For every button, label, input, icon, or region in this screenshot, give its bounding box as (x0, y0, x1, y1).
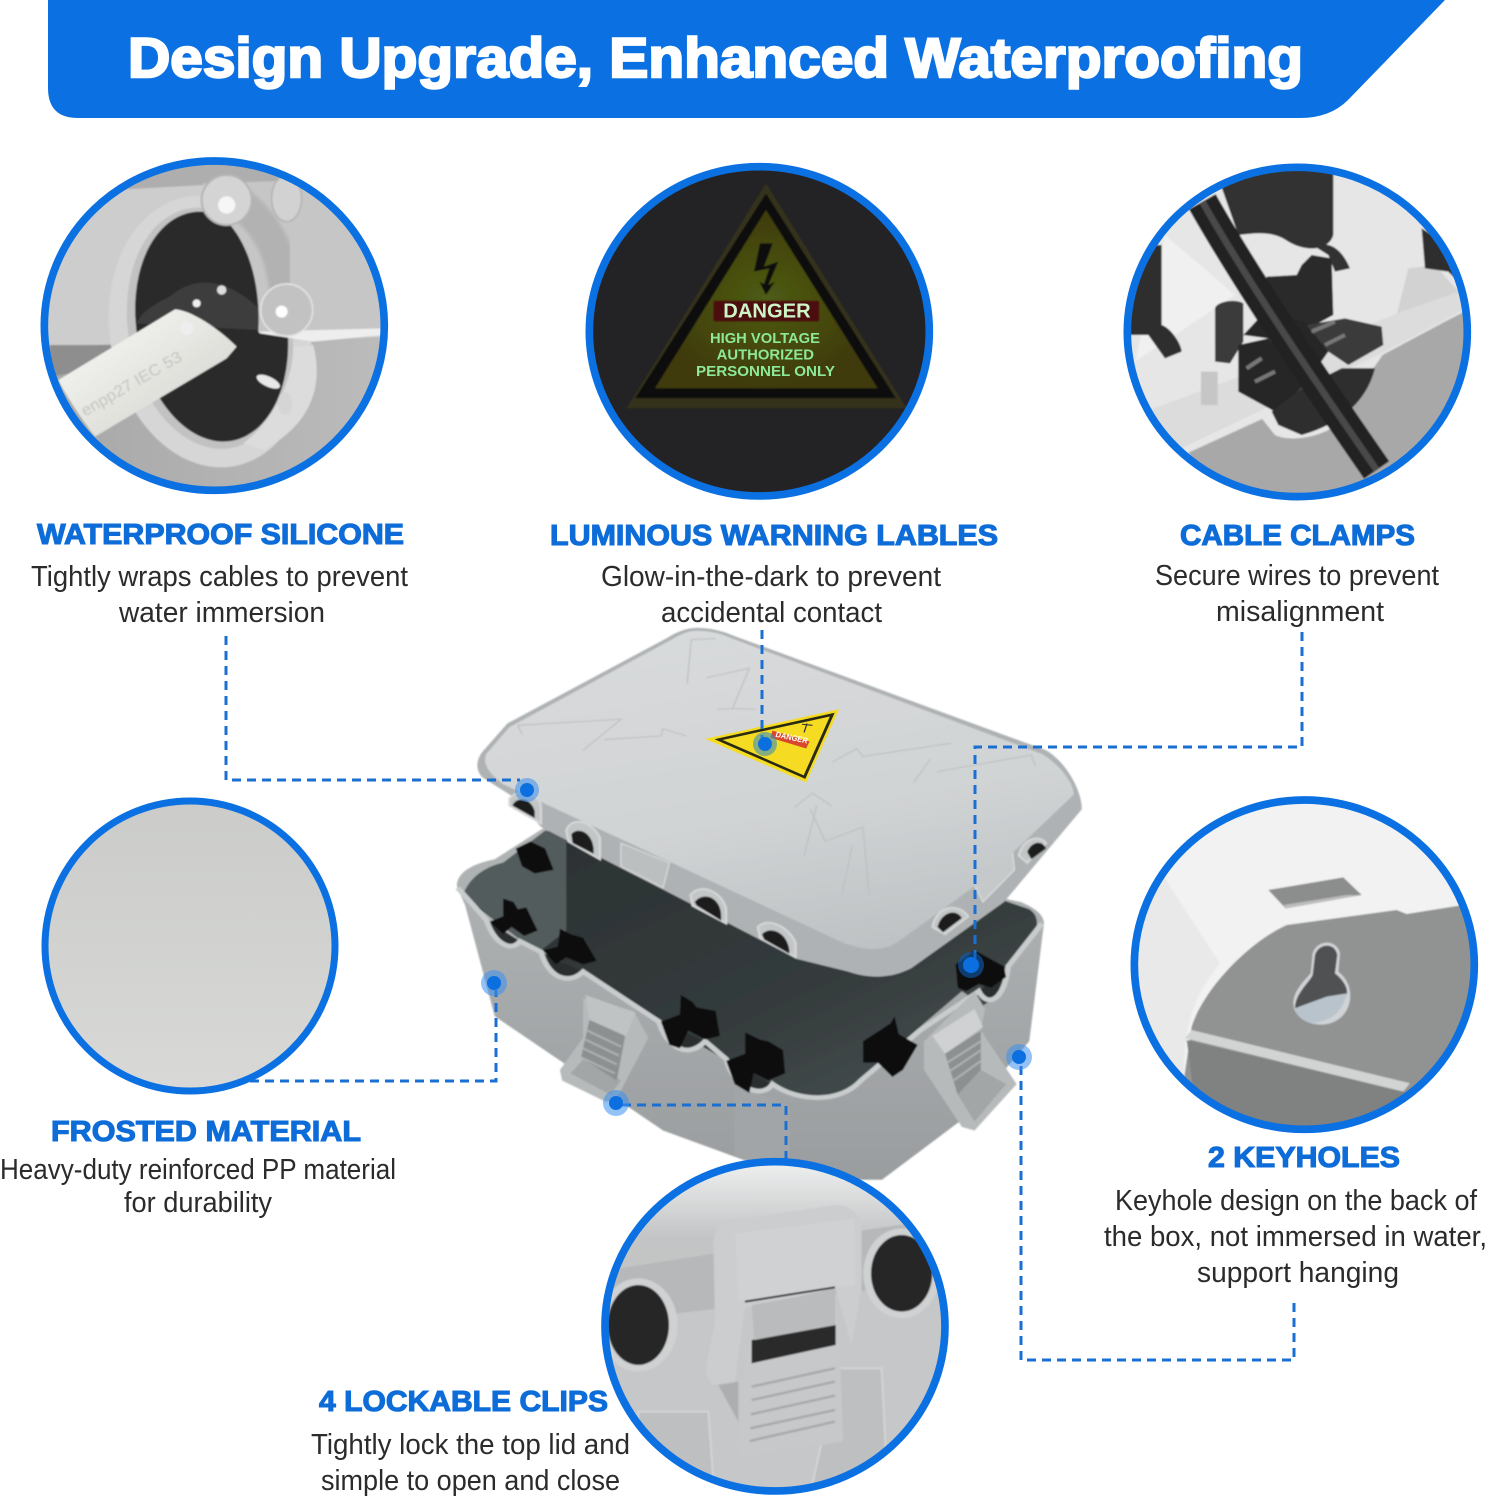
circle photo: glowing danger label (580, 160, 940, 507)
description: Heavy-duty reinforced PP material (0, 1154, 396, 1186)
marker dot: clamps (958, 952, 984, 978)
description: for durability (124, 1187, 272, 1219)
heading: WATERPROOF SILICONE (37, 519, 404, 551)
heading: FROSTED MATERIAL (51, 1116, 361, 1148)
description: Secure wires to prevent (1155, 560, 1439, 592)
rim cable holes (512, 799, 1046, 954)
description (31, 561, 408, 629)
description: simple to open and close (321, 1465, 620, 1497)
right latch (924, 991, 1017, 1131)
box interior (461, 831, 1037, 1097)
central product photo: junction box (457, 628, 1082, 1180)
circle photo: cable clamps (1124, 164, 1472, 500)
embossed lightning marks (518, 639, 1036, 895)
heading: LUMINOUS WARNING LABLES (550, 520, 998, 552)
leader line: cable clamps (975, 632, 1302, 960)
caption: luminous warning labels (550, 520, 998, 629)
description (0, 1154, 396, 1219)
circle photo: waterproof silicone: enpp27 IEC 53 (78, 349, 185, 420)
box rim (458, 888, 1042, 1098)
marker dot: keyholes (1006, 1044, 1032, 1070)
description (311, 1429, 630, 1497)
description (601, 561, 941, 629)
caption: keyholes (1104, 1142, 1487, 1289)
description (1104, 1185, 1487, 1289)
heading: CABLE CLAMPS (1180, 520, 1415, 552)
rim cable arches (509, 792, 1046, 957)
box base body (457, 827, 1044, 1180)
description: misalignment (1216, 596, 1384, 628)
marker dot: clips (603, 1090, 629, 1116)
marker dot: silicone (515, 778, 539, 802)
description: support hanging (1197, 1257, 1399, 1289)
caption: cable clamps (1155, 520, 1439, 628)
description: Tightly wraps cables to prevent (31, 561, 408, 593)
circle photo: keyholes (1120, 790, 1489, 1140)
left latch (560, 995, 648, 1102)
heading: 4 LOCKABLE CLIPS (319, 1386, 608, 1418)
circle photo: lockable clips (595, 1155, 955, 1500)
description: Glow-in-the-dark to prevent (601, 561, 941, 593)
leader line: keyholes (1021, 1066, 1294, 1360)
yellow danger label: DANGER (775, 730, 810, 745)
inner left wall (463, 831, 566, 950)
description (1155, 560, 1439, 628)
clamp scallop lobes (486, 920, 1008, 1092)
lid latches (621, 843, 1015, 902)
leader line: lockable clips (622, 1105, 786, 1165)
title text: Design Upgrade, Enhanced Waterproofing (128, 26, 1303, 89)
title banner (48, 0, 1445, 118)
circle photo: waterproof silicone (30, 150, 400, 500)
leader line: waterproof silicone (226, 636, 520, 780)
lid rim (477, 628, 1082, 977)
marker dot: frosted (481, 970, 507, 996)
caption: waterproof silicone (31, 519, 408, 629)
circle photo: glowing danger label: AUTHORIZED (717, 347, 814, 363)
leader line: luminous labels (760, 630, 764, 740)
circle photo: glowing danger label: PERSONNEL ONLY (696, 364, 835, 380)
circle photo: glowing danger label: DANGER (723, 300, 811, 322)
black cable clamps (490, 841, 1006, 1093)
leader line: frosted material (250, 990, 496, 1081)
circle photo: frosted material (45, 801, 335, 1091)
heading: 2 KEYHOLES (1208, 1142, 1400, 1174)
body panel shading (735, 1084, 789, 1180)
description: Tightly lock the top lid and (311, 1429, 630, 1461)
lid top (485, 631, 1074, 949)
description: accidental contact (661, 597, 882, 629)
marker dot: label (753, 732, 777, 756)
description: water immersion (118, 597, 325, 629)
circle photo: glowing danger label: HIGH VOLTAGE (710, 331, 820, 347)
caption: frosted material (0, 1116, 396, 1219)
caption: lockable clips (311, 1386, 630, 1497)
yellow danger label (705, 709, 839, 782)
